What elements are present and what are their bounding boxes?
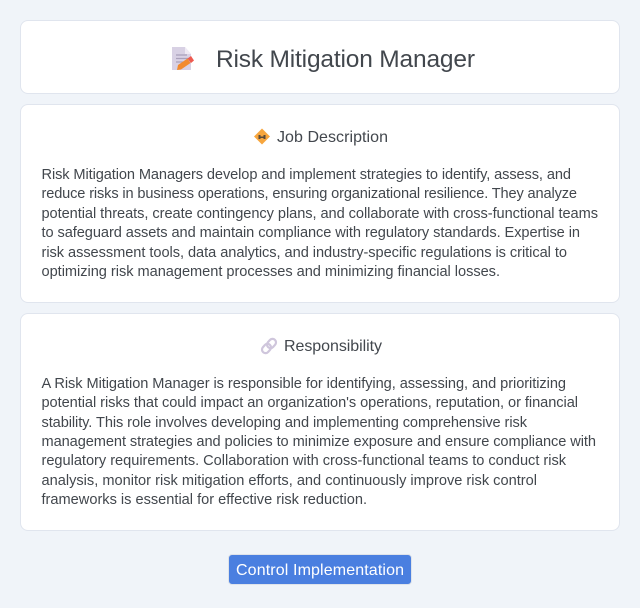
panel: responsibility [20,313,620,531]
heading: job description: Job Description [277,129,388,146]
panel: title card [20,20,620,94]
icon: chain link [261,337,277,355]
button: control implementation [228,554,412,585]
button: control implementation: Control Implementation [236,562,404,579]
text block: responsibility: regulatory requirements. Collaboration with cross-functional teams to conduct risk [42,453,567,469]
text block: job description: potential threats, create contingency plans, and collaborate with cross-functional teams [42,206,598,222]
title: Risk Mitigation Manager [216,46,475,73]
text block: responsibility: management strategies and policies to minimize exposure and ensure compliance with [42,434,596,450]
text block: job description: to safeguard assets and maintain compliance with regulatory standards. Expertise in [42,225,580,241]
text block: responsibility: A Risk Mitigation Manager is responsible for identifying, assessing, and prioritizing [42,376,566,392]
text block: responsibility: potential risks that could impact an organization's operations, reputation, or financial [42,395,578,411]
text block: responsibility: stability. This role involves developing and implementing comprehensive risk [42,415,528,431]
text block: job description: reduce risks in business operations, ensuring organizational resilience. They analyze [42,186,577,202]
text block: job description: Risk Mitigation Managers develop and implement strategies to identify, assess, and [42,167,571,183]
panel: job description [20,104,620,303]
text block: job description: optimizing risk management processes and minimizing financial losses. [42,264,500,280]
text block: responsibility: frameworks is essential for effective risk reduction. [42,492,367,508]
text block: job description: risk assessment tools, data analytics, and industry-specific regulations is critical to [42,245,567,261]
heading: responsibility: Responsibility [284,338,382,355]
icon: orange diamond [254,128,270,144]
text block: responsibility: analysis, monitor risk mitigation efforts, and continuously improve risk control [42,473,537,489]
text block: job description [42,167,598,280]
text block: responsibility [42,376,596,508]
icon: document with pencil [172,47,194,70]
